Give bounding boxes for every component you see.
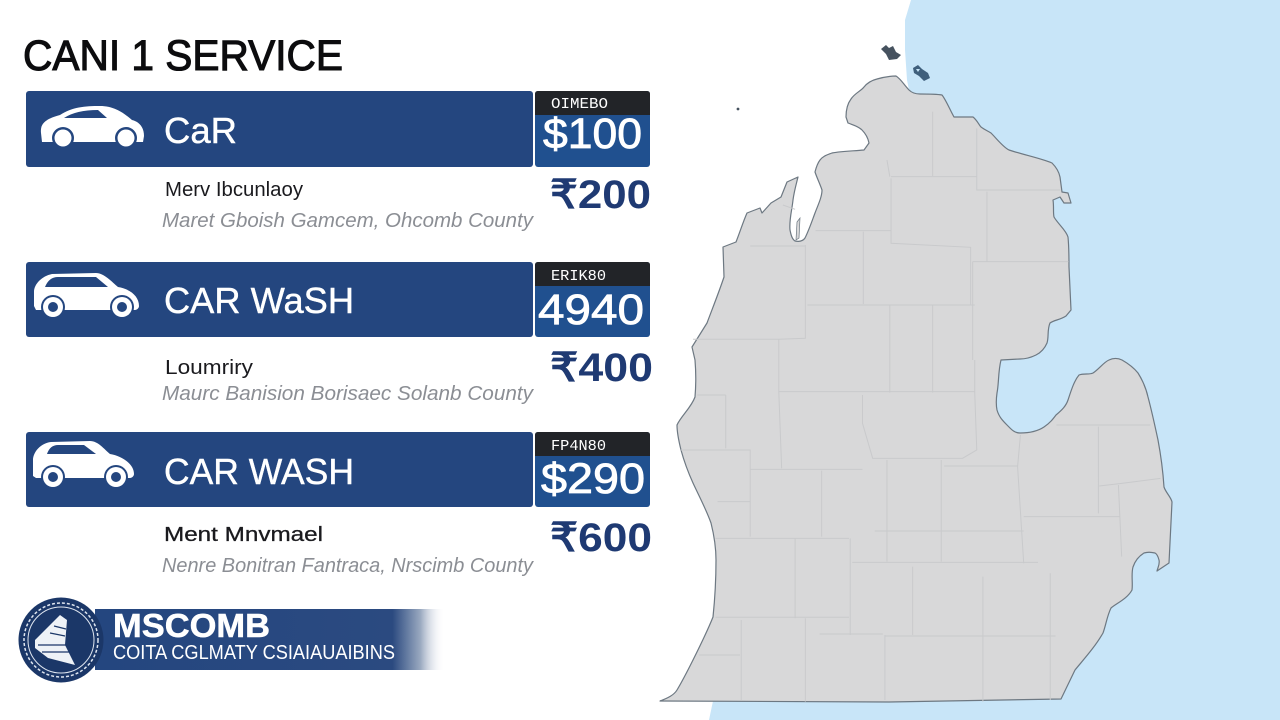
price box xyxy=(535,262,650,337)
service bar xyxy=(26,262,533,337)
island: small dot xyxy=(737,108,739,110)
location: Maurc Banision Borisaec Solanb County xyxy=(162,383,534,405)
price box xyxy=(535,91,650,167)
price box: $290 xyxy=(541,455,645,503)
banner heading: MSCOMB xyxy=(113,607,270,644)
icon: sedan xyxy=(41,106,144,149)
price box: ERIK80 xyxy=(551,268,606,285)
map outline xyxy=(660,76,1172,702)
panel: lake water xyxy=(709,0,1280,720)
icon: round seal xyxy=(18,598,104,682)
county lines south xyxy=(681,360,1160,702)
price box: OIMEBO xyxy=(551,96,608,113)
panel: service row 1 xyxy=(26,91,651,232)
footer logo banner xyxy=(18,598,445,682)
price box: $100 xyxy=(543,110,642,158)
panel: service row 3 xyxy=(26,432,652,577)
service detail: Ment Mnvmael xyxy=(164,524,323,546)
icon: hatchback xyxy=(33,441,134,489)
island: dark north-west xyxy=(881,45,901,60)
banner strip xyxy=(95,609,445,670)
service name: CAR WASH xyxy=(164,451,354,492)
service bar xyxy=(26,91,533,167)
county lines north xyxy=(693,112,1069,360)
island: ring north-east xyxy=(913,65,930,81)
service name: CaR xyxy=(164,110,237,151)
secondary price: ₹400 xyxy=(550,346,653,390)
location: Nenre Bonitran Fantraca, Nrscimb County xyxy=(162,555,534,577)
service bar xyxy=(26,432,533,507)
map: Michigan lower peninsula xyxy=(660,45,1172,702)
icon: hatchback xyxy=(34,273,139,319)
secondary price: ₹600 xyxy=(550,516,652,560)
banner subtitle: COITA CGLMATY CSIAIAUAIBINS xyxy=(113,642,395,664)
title: CANI 1 SERVICE xyxy=(23,32,343,80)
secondary price: ₹200 xyxy=(550,173,651,217)
service detail: Merv Ibcunlaoy xyxy=(165,179,303,201)
price box: 4940 xyxy=(538,286,644,334)
service detail: Loumriry xyxy=(165,357,253,379)
service name: CAR WaSH xyxy=(164,280,354,321)
panel: service row 2 xyxy=(26,262,653,405)
location: Maret Gboish Gamcem, Ohcomb County xyxy=(162,210,534,232)
price box xyxy=(535,432,650,507)
price box: FP4N80 xyxy=(551,438,606,455)
island: bay sliver xyxy=(796,218,800,240)
